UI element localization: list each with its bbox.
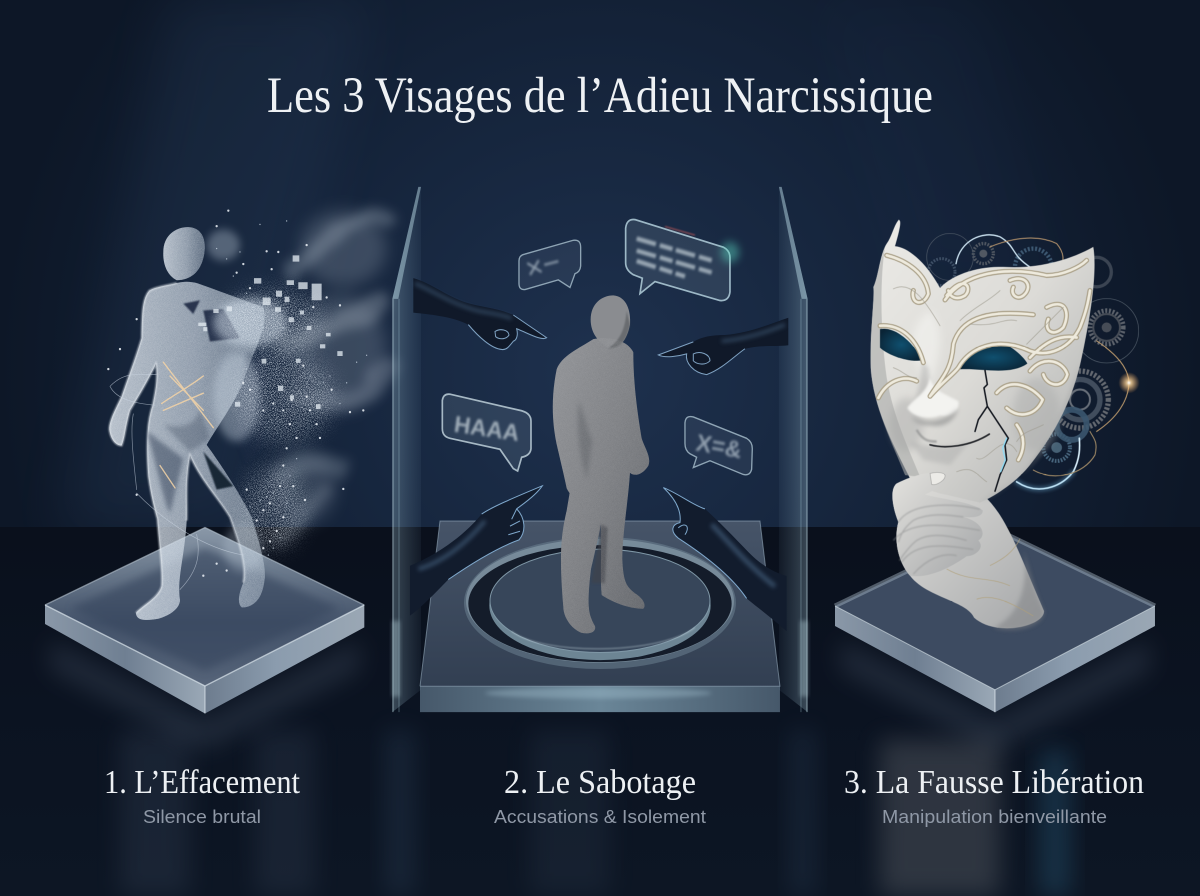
title: Les 3 Visages de l’Adieu Narcissique — [267, 68, 933, 124]
glowing orbit rings — [956, 235, 1140, 489]
smoke trail — [270, 211, 390, 538]
speech bubble large — [626, 220, 739, 301]
nose and mouth shading — [910, 361, 929, 408]
heading 2: 2. Le Sabotage — [504, 764, 696, 801]
speech bubble left: HAAA — [453, 410, 521, 446]
marble fingers over mask chin — [892, 472, 983, 576]
subtitle 1: Silence brutal — [143, 807, 261, 827]
eye openings — [880, 329, 923, 361]
circular rings — [464, 537, 736, 669]
panel: l'effacement — [45, 211, 390, 713]
subtitle 3: Manipulation bienveillante — [882, 807, 1107, 827]
caption 3 — [844, 764, 1144, 827]
right glass panel — [779, 187, 808, 712]
marble hand — [892, 472, 1044, 630]
accusing hand top left — [413, 278, 547, 350]
background wall — [0, 0, 1200, 530]
heading 1: 1. L’Effacement — [104, 764, 300, 801]
accusing hand bottom left — [410, 486, 542, 616]
floor with reflections — [0, 527, 1200, 896]
panel: la fausse liberation — [835, 220, 1155, 712]
central standing figure — [553, 295, 649, 633]
glass plinth 3 — [835, 529, 1155, 712]
speech bubble right — [685, 417, 752, 475]
dissolving human figure — [109, 227, 287, 620]
caption 1 — [104, 764, 300, 827]
subtitle 2: Accusations & Isolement — [494, 807, 706, 827]
speech bubble small top: ×− — [522, 244, 564, 287]
left glass panel — [392, 187, 421, 712]
speech bubble right: X=& — [694, 430, 744, 465]
gold filigree — [878, 255, 1090, 482]
heading 3: 3. La Fausse Libération — [844, 764, 1144, 801]
speech bubble small top — [519, 240, 581, 290]
square glass base — [420, 521, 780, 712]
accusing hand bottom right — [663, 488, 787, 631]
caption 2 — [494, 764, 706, 827]
glass plinth 1 — [45, 528, 364, 713]
panel: le sabotage — [392, 187, 808, 712]
crack — [975, 370, 1008, 491]
clockwork gears — [927, 233, 1139, 461]
accusing hand top right — [658, 318, 788, 375]
digital particles — [108, 211, 367, 576]
speckled dust cloud — [223, 290, 333, 548]
glowing threads — [110, 362, 243, 590]
speech bubble left — [442, 394, 531, 471]
marble mask — [870, 220, 1095, 503]
